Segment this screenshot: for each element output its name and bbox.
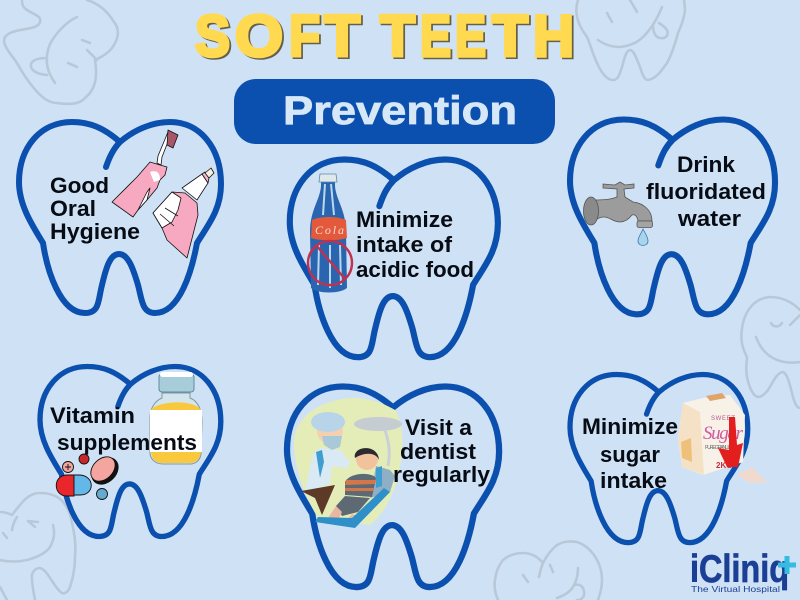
icon: spilled sugar [737, 467, 767, 483]
label: drink fluoridated water: water [677, 206, 741, 231]
tooth outline 3 [570, 120, 775, 314]
decorative tooth right side [741, 297, 800, 408]
label: vitamin supplements [50, 403, 197, 455]
label: minimize sugar intake: sugar [600, 442, 660, 467]
icon: cola bottle [310, 174, 347, 292]
panel: vitamin supplements [40, 366, 221, 536]
label: drink fluoridated water: fluoridated [646, 179, 766, 204]
label: visit a dentist regularly: regularly [393, 462, 490, 487]
label: good oral hygiene: Good [50, 173, 109, 198]
label: minimize intake of acidic food: Minimize [356, 207, 453, 232]
icon: faucet [584, 182, 652, 246]
title [195, 4, 576, 71]
title: E [422, 6, 453, 71]
icon: cola bottle: Cola [315, 223, 344, 237]
decorative tooth top left [4, 0, 118, 104]
title: E [455, 4, 486, 69]
title: O [235, 4, 283, 69]
label: minimize sugar intake: intake [600, 468, 667, 493]
icon: dentist scene [294, 398, 402, 528]
label: good oral hygiene: Hygiene [50, 219, 140, 244]
title: F [289, 4, 320, 69]
icon: sugar bag: 2KG [716, 461, 732, 470]
label: minimize sugar intake: Minimize [582, 414, 678, 439]
panel: minimize acidic food [290, 160, 498, 357]
label: drink fluoridated water [646, 152, 766, 231]
icon: sugar bag: PURE GRANULATED [705, 445, 739, 451]
decorative tooth bottom left [0, 493, 75, 600]
heading pill: Prevention [283, 89, 517, 133]
logo: iCliniq: The Virtual Hospital [691, 584, 780, 594]
heading pill [234, 79, 555, 144]
title: E [420, 4, 451, 69]
title: O [237, 6, 285, 71]
panel: drink fluoridated water [570, 120, 775, 314]
label: good oral hygiene: Oral [50, 196, 96, 221]
title: S [195, 4, 230, 69]
label: minimize intake of acidic food: intake of [356, 232, 453, 257]
label: minimize intake of acidic food [356, 207, 474, 282]
label: vitamin supplements: supplements [57, 430, 197, 455]
icon: red down arrow [718, 417, 743, 467]
label: minimize intake of acidic food: acidic food [356, 257, 474, 282]
icon: toothbrush and hands [112, 130, 214, 258]
title: T [492, 4, 528, 69]
label: visit a dentist regularly [393, 415, 490, 487]
title: T [382, 6, 417, 71]
icon: sugar bag [678, 393, 745, 475]
title: T [326, 6, 362, 71]
title: E [457, 6, 488, 71]
tooth outline 2 [290, 160, 498, 357]
icon: pills [56, 452, 123, 500]
tooth outline 6 [570, 374, 748, 543]
icon: prohibition sign [308, 241, 352, 285]
label: good oral hygiene [50, 173, 140, 244]
label: visit a dentist regularly: Visit a [405, 415, 472, 440]
title: S [197, 6, 232, 71]
title: H [535, 6, 576, 71]
title: T [380, 4, 415, 69]
label: minimize sugar intake [582, 414, 678, 493]
label: vitamin supplements: Vitamin [50, 403, 135, 428]
icon: sugar bag: SWEET [711, 416, 735, 422]
icon: vitamin jar [150, 372, 202, 464]
title: F [291, 6, 322, 71]
label: drink fluoridated water: Drink [677, 152, 735, 177]
tooth outline 5 [287, 387, 499, 587]
title: T [494, 6, 530, 71]
decorative tooth bottom centre [495, 541, 602, 600]
title: T [324, 4, 360, 69]
icon: sugar bag: Sugar [703, 423, 744, 444]
tooth outline 4 [40, 366, 221, 536]
panel: minimize sugar intake [570, 374, 767, 543]
decorative tooth top right [576, 0, 685, 80]
panel: good oral hygiene [19, 122, 221, 313]
title: H [533, 4, 574, 69]
panel: visit a dentist [287, 387, 499, 587]
tooth outline 1 [19, 122, 221, 313]
label: visit a dentist regularly: dentist [400, 439, 477, 464]
